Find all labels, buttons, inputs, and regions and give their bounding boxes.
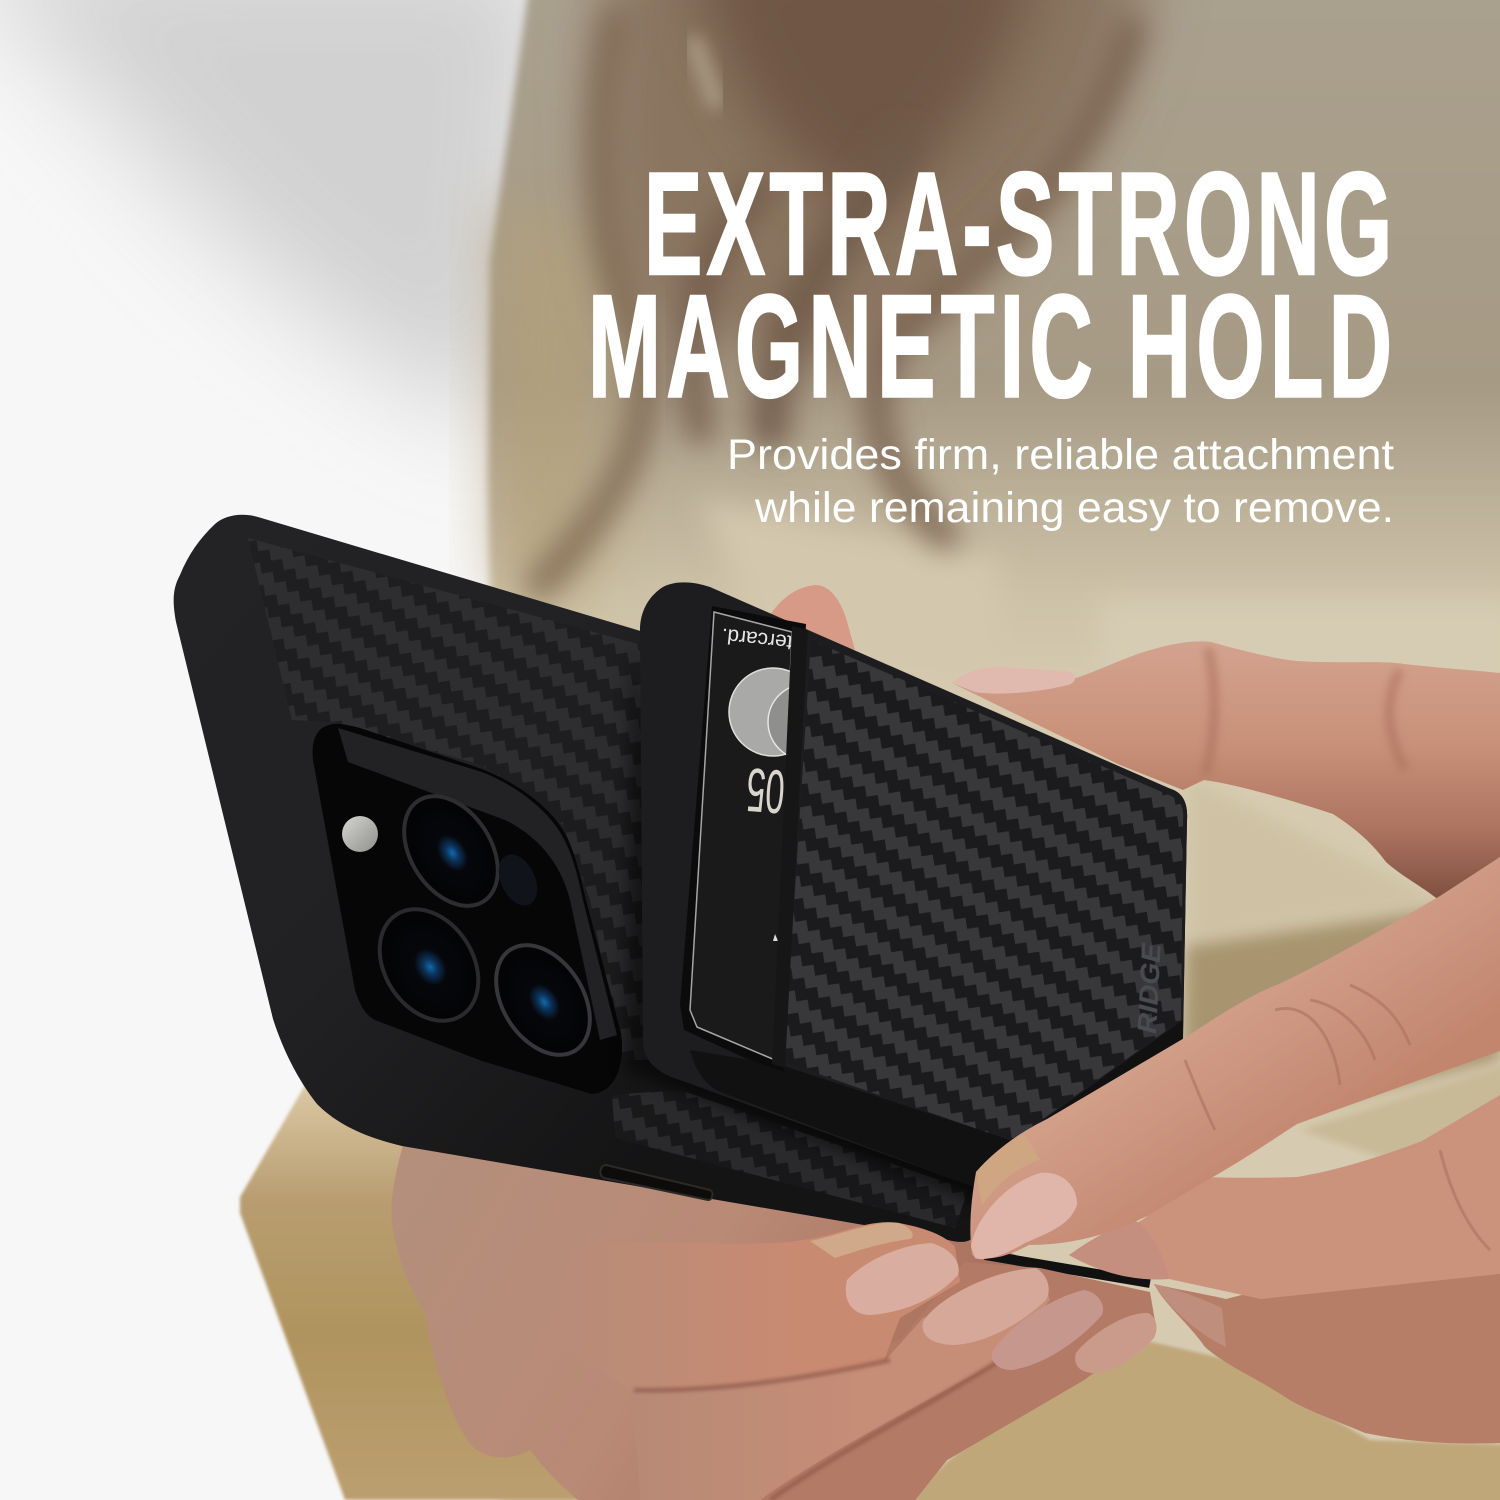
card logo circles [728,667,790,757]
fingertip callus [810,1223,913,1258]
card text: mastercard: tercard. [720,624,794,654]
grip cover edge [772,626,808,1068]
subtitle text [727,431,1394,532]
hand: lower left palm [391,1125,1156,1500]
fingernail: little [1075,1313,1156,1373]
second finger [1069,1095,1500,1299]
camera lens: left [359,891,499,1039]
hand: lower left fingers [558,1222,1156,1500]
finger shading [634,1360,1000,1500]
hand: fingertip behind grip [770,585,855,650]
fingernail: ring [992,1290,1103,1370]
magnetic wallet grip [640,582,1187,1190]
wallet grip shadow [625,640,1180,1205]
fingernail: index [971,1173,1077,1259]
background: brown hair [540,0,1150,585]
grip lower edge [690,1020,1183,1190]
card text: number: 05 [744,754,787,826]
camera sensor [491,848,545,912]
subtitle text: Provides firm, reliable attachment [727,431,1394,479]
camera raised ring [338,728,617,1040]
case branding: RIDGE [1132,942,1167,1034]
background: beige blazer [488,0,1500,1500]
exposed card slot [680,606,806,1072]
side button [600,1165,712,1200]
fingernail: middle [923,1268,1049,1345]
title [588,142,1392,428]
index finger [558,1222,960,1390]
fingernail: third finger [1154,1284,1226,1347]
camera island [313,724,622,1094]
camera flash [342,816,378,852]
subtitle text: while remaining easy to remove. [754,484,1394,532]
hand: upper right fingers [952,641,1500,901]
camera lens: upper [385,779,517,923]
knuckle creases [1185,985,1490,1250]
phone case [174,515,1187,1283]
knuckle shading [1205,648,1405,775]
ring and little fingers [640,1262,1156,1500]
fingernail: upper finger [952,667,1075,694]
third finger [1154,1260,1500,1443]
hand: lower right fingers [970,857,1500,1443]
title: MAGNETIC HOLD [588,264,1392,428]
fingertip callus [976,1135,1040,1205]
background: tan trousers lower right [880,1330,1500,1500]
lower carbon band [612,1090,968,1228]
carbon texture on case back [248,538,660,1060]
fingernail: second finger [1069,1221,1169,1279]
phone underside between fingers [985,1255,1150,1283]
fingernail: index [846,1243,959,1315]
card mark [773,934,778,941]
credit card [689,611,792,1060]
case body [174,515,1187,1242]
background: tan jacket lower left [240,1080,700,1500]
index finger [970,857,1500,1258]
grip carbon texture [784,640,1183,1141]
middle finger [633,1270,1050,1500]
camera lens: right [477,928,609,1072]
title: EXTRA-STRONG [644,142,1392,306]
